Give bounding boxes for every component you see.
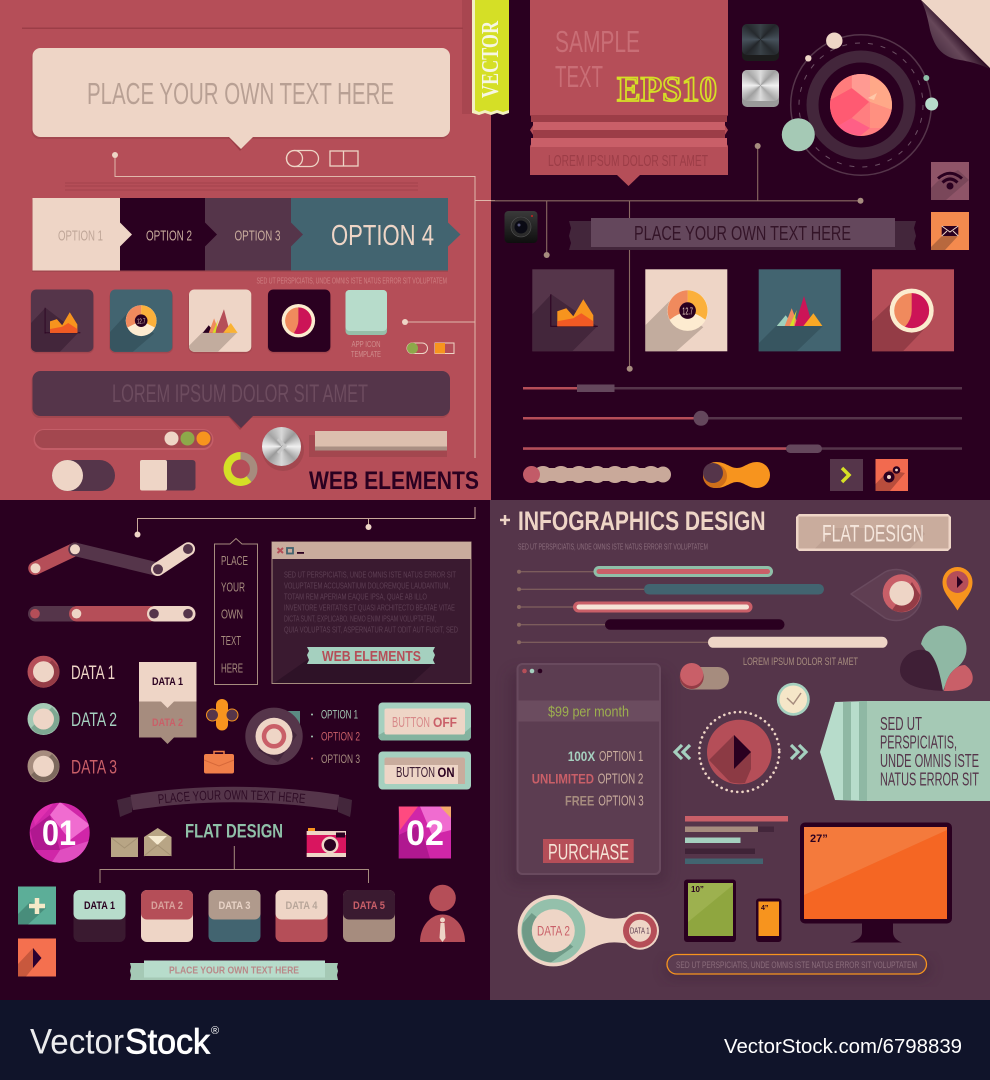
panel: sample text banner: EPS10 (617, 69, 717, 109)
data legend (28, 656, 117, 782)
ribbon: vector (462, 0, 509, 115)
envelopes (111, 828, 172, 857)
small location pin (942, 567, 972, 610)
slider 1 (523, 384, 962, 392)
heart petals (900, 626, 973, 691)
web elements title: WEB ELEMENTS (309, 467, 479, 495)
progress bars (517, 566, 888, 668)
data card 2: DATA 2 (151, 900, 183, 912)
play button (699, 712, 779, 792)
heading: INFOGRAPHICS DESIGN (518, 506, 766, 536)
pricing panel: UNLIMITED (532, 770, 594, 786)
tablet: 10” (691, 885, 704, 894)
monitor: 27” (810, 833, 828, 845)
linked chain angled (30, 544, 193, 574)
badge 02 (399, 806, 451, 858)
icon: mail (931, 212, 969, 250)
window mock-up: DICTA SUNT, EXPLICABO. NEMO ENIM IPSAM VOLUPTATEM, (284, 613, 436, 623)
url: VectorStock.com/6798839 (724, 1036, 962, 1058)
option list: OPTION 1 (321, 708, 358, 722)
panel: web elements (22, 28, 495, 495)
connector lines (112, 152, 495, 458)
panel: sample text banner: SAMPLE (555, 24, 640, 59)
window mock-up (272, 542, 471, 684)
ribbon: place your own text (569, 218, 916, 250)
icon: person (420, 885, 465, 942)
logo (30, 1022, 219, 1061)
flat bar (309, 431, 447, 457)
metal button dark (742, 24, 779, 61)
square switch (140, 460, 196, 490)
vertical list box: PLACE (221, 553, 248, 568)
briefcase (204, 752, 234, 774)
button: chevron (830, 459, 863, 491)
tablet (684, 880, 736, 942)
button on: BUTTON (396, 764, 435, 781)
panel: sample text banner (530, 0, 728, 186)
panel: bottom-left elements (18, 507, 476, 980)
target (245, 708, 303, 765)
option arrows: SED UT PERSPICIATIS, UNDE OMNIS ISTE NATUS ERROR SIT VOLUPTATEM (256, 276, 447, 286)
data card 4: DATA 4 (286, 900, 318, 912)
window mock-up: VOLUPTATEM ACCUSANTIUM DOLOREMQUE LAUDANTIUM, (284, 580, 450, 590)
pricing panel: FREE (565, 792, 594, 808)
phone (756, 898, 782, 942)
dark speech bubble (32, 371, 450, 430)
stacked tab: DATA 2 (152, 717, 183, 729)
data card 2 (141, 890, 193, 942)
bar chart (685, 816, 788, 864)
vertical list box (214, 538, 258, 684)
small toggles (407, 343, 454, 354)
option arrows: OPTION 1 (58, 228, 103, 244)
vertical list box: HERE (221, 660, 243, 675)
button on (378, 752, 471, 790)
speech bubble (32, 48, 450, 151)
button: play (18, 938, 56, 976)
switch (680, 663, 729, 690)
phone: 4” (761, 905, 768, 912)
button off (378, 702, 471, 741)
connector (134, 507, 475, 538)
orbit diagram (782, 32, 938, 175)
metal knob (262, 426, 304, 471)
pricing panel: 100X (568, 748, 596, 764)
window mock-up: INVENTORE VERITATIS ET QUASI ARCHITECTO BEATAE VITAE (284, 602, 455, 612)
monitor (800, 822, 952, 942)
tile: donut pie: 12.7 (682, 306, 693, 317)
outline toggles (286, 150, 358, 166)
tile: peaks (759, 269, 841, 351)
button on: ON (438, 765, 454, 780)
linked chain straight (28, 606, 196, 622)
heading: SED UT PERSPICIATIS, UNDE OMNIS ISTE NATUS ERROR SIT VOLUPTATEM (518, 542, 708, 552)
sliders (523, 384, 962, 453)
app icon: peaks (188, 290, 252, 353)
flat design badge: FLAT DESIGN (822, 520, 924, 548)
app icon: donut pie: 12.7 (137, 316, 145, 325)
wavy bar (523, 466, 671, 483)
option list: OPTION 3 (321, 752, 360, 766)
ribbon: place your own text: PLACE YOUR OWN TEXT HERE (634, 222, 851, 245)
slider 3 (523, 444, 962, 453)
logo: ® (211, 1025, 219, 1037)
vertical list box: TEXT (221, 633, 241, 648)
pricing panel (508, 664, 668, 885)
option list: OPTION 2 (321, 730, 360, 744)
tile: ring chart (872, 269, 954, 351)
option arrows: OPTION 4 (331, 220, 434, 252)
dumbbell data (518, 895, 659, 966)
pricing panel: PURCHASE (548, 840, 629, 864)
option arrows (32, 198, 460, 286)
slider 2 (523, 411, 962, 426)
folded mint banner (820, 701, 990, 801)
progress with dots (34, 429, 214, 450)
logo: Vector (30, 1022, 124, 1061)
flat design badge (796, 514, 951, 551)
panel: infographics design (500, 506, 990, 980)
data legend: DATA 2 (71, 709, 117, 731)
curved ribbon: PLACE YOUR OWN TEXT HERE (158, 790, 306, 804)
app icon template: TEMPLATE (351, 349, 381, 359)
pricing panel: OPTION 2 (598, 772, 643, 788)
logo: Stock (125, 1022, 210, 1061)
button off: BUTTON (392, 714, 430, 731)
icon: wifi (931, 162, 969, 200)
tile: area chart (532, 269, 614, 351)
option list (311, 708, 360, 766)
clock (777, 683, 810, 716)
speech bubble: PLACE YOUR OWN TEXT HERE (87, 76, 394, 111)
vertical list box: OWN (221, 606, 243, 621)
badge 02: 02 (406, 814, 444, 853)
tree connector (100, 846, 368, 883)
app icon template (346, 290, 387, 359)
pricing panel: $99 per month (548, 704, 629, 720)
chevrons left (675, 745, 690, 759)
data legend: DATA 3 (71, 756, 117, 778)
chevrons right (791, 745, 806, 759)
icon: camera app (504, 211, 538, 243)
donut (227, 456, 254, 482)
data legend: DATA 1 (71, 662, 115, 684)
dumbbell data: DATA 1 (630, 926, 650, 936)
app icon template: APP ICON (352, 339, 380, 349)
orange pill caption (664, 954, 932, 980)
option arrows: OPTION 2 (146, 228, 192, 244)
data card 4 (276, 890, 328, 942)
dark speech bubble: LOREM IPSUM DOLOR SIT AMET (112, 380, 368, 408)
data card 3: DATA 3 (218, 900, 250, 912)
data card 5 (343, 890, 395, 942)
window mock-up: SED UT PERSPICIATIS, UNDE OMNIS ISTE NATUS ERROR SIT (284, 569, 456, 579)
stacked tab (139, 662, 196, 744)
vertical list box: YOUR (221, 580, 245, 595)
connectors (491, 143, 864, 372)
app icon: donut pie (109, 290, 173, 353)
data card 1: DATA 1 (84, 900, 115, 912)
big location pin (851, 570, 922, 620)
badge 01 (29, 802, 92, 865)
progress bars: LOREM IPSUM DOLOR SIT AMET (743, 656, 858, 668)
tile: donut pie (645, 269, 727, 351)
orange dumbbell toggle (703, 462, 770, 488)
option arrows: OPTION 3 (234, 228, 280, 244)
panel: sample text banner: TEXT (555, 59, 603, 94)
ribbon: bottom: PLACE YOUR OWN TEXT HERE (169, 964, 299, 976)
button off: OFF (433, 715, 457, 730)
orange cross icon (206, 699, 238, 730)
panel: sample text banner: LOREM IPSUM DOLOR SIT AMET (548, 153, 708, 170)
stacked tab: DATA 1 (152, 676, 183, 688)
window mock-up: QUIA VOLUPTAS SIT, ASPERNATUR AUT ODIT AUT FUGIT, SED (284, 624, 458, 634)
pricing panel: OPTION 3 (598, 794, 644, 810)
window mock-up: WEB ELEMENTS (322, 648, 421, 665)
data card 3 (208, 890, 260, 942)
data card 1 (74, 890, 126, 942)
page curl (921, 0, 990, 69)
app icon: area chart (30, 290, 94, 353)
camera (307, 828, 346, 857)
button: gears (876, 459, 908, 491)
ribbon: bottom (130, 960, 338, 980)
badge 01: 01 (42, 814, 76, 853)
dumbbell data: DATA 2 (537, 922, 570, 938)
window mock-up: TOTAM REM APERIAM EAQUE IPSA, QUAE AB ILLO (284, 591, 427, 601)
footer (0, 1000, 990, 1080)
folded mint banner: SED UT (880, 714, 922, 734)
heading (500, 506, 766, 552)
metal button light (742, 70, 779, 107)
pricing panel: OPTION 1 (599, 749, 643, 765)
toggle switch (52, 460, 115, 491)
curved ribbon (117, 786, 352, 817)
app icon: ring chart (267, 290, 331, 353)
data card 5: DATA 5 (353, 900, 385, 912)
flat design label: FLAT DESIGN (185, 820, 283, 842)
button: plus (18, 886, 56, 924)
